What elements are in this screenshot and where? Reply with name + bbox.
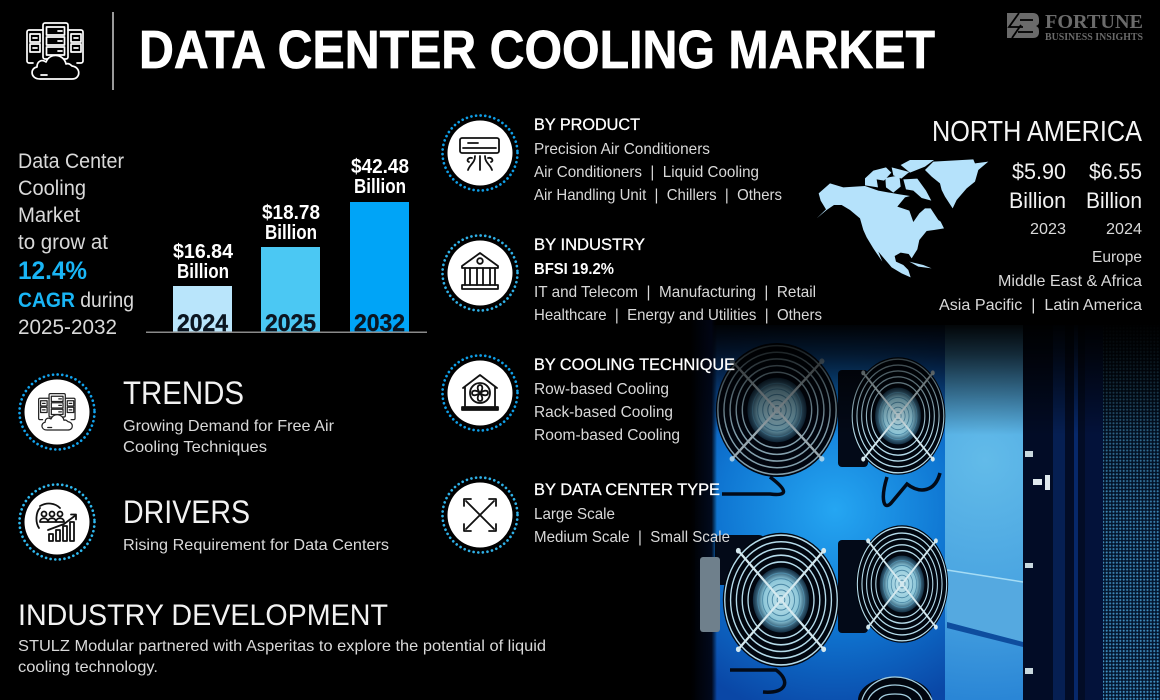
by product: Air Conditioners | Liquid Cooling xyxy=(534,164,759,181)
industry development: STULZ Modular partnered with Asperitas to explore the potential of liquid xyxy=(18,638,546,655)
bar chart: market size xyxy=(146,156,427,337)
market values: 2024 xyxy=(1106,221,1142,238)
market growth text: CAGR during xyxy=(18,289,134,312)
market values: 2023 xyxy=(1030,221,1066,238)
by data center type: Medium Scale | Small Scale xyxy=(534,529,730,546)
bar 2025: Billion xyxy=(265,222,317,244)
drivers text xyxy=(123,494,389,554)
by product: BY PRODUCT xyxy=(534,115,640,134)
by data center type: BY DATA CENTER TYPE xyxy=(534,480,720,499)
bar 2024: $16.84 xyxy=(173,241,234,263)
icon: by data center type arrows xyxy=(442,478,518,552)
logo: Fortune Business Insights xyxy=(1007,11,1143,43)
market growth text: 2025-2032 xyxy=(18,316,117,339)
by industry: BFSI 19.2% xyxy=(534,261,614,278)
by industry: BY INDUSTRY xyxy=(534,235,645,254)
industry development xyxy=(18,599,546,676)
icon: by cooling technique house fan xyxy=(442,356,518,430)
market values: Billion xyxy=(1009,188,1066,213)
market growth text: Cooling xyxy=(18,177,86,200)
bar 2032: 2032 xyxy=(354,310,405,337)
by cooling technique xyxy=(534,355,735,444)
by cooling technique: Rack-based Cooling xyxy=(534,404,673,421)
by data center type xyxy=(534,480,730,546)
by industry xyxy=(534,235,822,324)
by product: Precision Air Conditioners xyxy=(534,141,710,158)
by industry: Healthcare | Energy and Utilities | Others xyxy=(534,307,822,324)
logo: Fortune Business Insights: FORTUNE xyxy=(1045,11,1143,33)
market growth text: to grow at xyxy=(18,231,108,254)
drivers text: Rising Requirement for Data Centers xyxy=(123,537,389,554)
other regions xyxy=(939,249,1142,314)
by product xyxy=(534,115,782,204)
market growth text: Data Center xyxy=(18,150,124,173)
icon: by industry bank building xyxy=(442,236,518,310)
trends text xyxy=(123,375,335,456)
bar 2024: 2024 xyxy=(177,310,229,337)
trends text: Growing Demand for Free Air xyxy=(123,418,335,435)
bar 2025: $18.78 xyxy=(262,202,320,224)
icon: by product air conditioner xyxy=(442,116,518,190)
other regions: Europe xyxy=(1092,249,1142,266)
bar 2032: Billion xyxy=(354,176,406,198)
by cooling technique: Row-based Cooling xyxy=(534,381,669,398)
by product: Air Handling Unit | Chillers | Others xyxy=(534,187,782,204)
market growth text: 12.4% xyxy=(18,257,87,285)
bar 2032 xyxy=(350,156,409,337)
by industry: IT and Telecom | Manufacturing | Retail xyxy=(534,284,816,301)
trends text: Cooling Techniques xyxy=(123,439,267,456)
map: North America xyxy=(817,159,988,277)
header divider xyxy=(112,12,114,90)
industry development: INDUSTRY DEVELOPMENT xyxy=(18,599,388,632)
by cooling technique: BY COOLING TECHNIQUE xyxy=(534,355,735,374)
bar 2024: Billion xyxy=(177,261,229,283)
icon: drivers xyxy=(20,484,94,560)
market values: $6.55 xyxy=(1089,159,1142,184)
bar 2025: 2025 xyxy=(265,310,316,337)
by cooling technique: Room-based Cooling xyxy=(534,427,680,444)
bar 2032: $42.48 xyxy=(351,156,409,178)
bar 2025 xyxy=(261,202,320,337)
by data center type: Large Scale xyxy=(534,506,615,523)
other regions: Middle East & Africa xyxy=(998,273,1142,290)
industry development: cooling technology. xyxy=(18,659,158,676)
header icon: servers and cloud xyxy=(27,23,83,79)
other regions: Asia Pacific | Latin America xyxy=(939,297,1142,314)
market values xyxy=(1009,159,1142,238)
market values: $5.90 xyxy=(1012,159,1066,184)
market values: Billion xyxy=(1086,188,1142,213)
market growth text: Market xyxy=(18,204,80,227)
icon: trends xyxy=(20,374,94,450)
trends text: TRENDS xyxy=(123,375,244,411)
market growth text xyxy=(18,150,134,339)
background photo: server rack cooling fans xyxy=(690,320,1160,700)
title: DATA CENTER COOLING MARKET xyxy=(139,20,935,80)
bar 2024 xyxy=(173,241,234,337)
drivers text: DRIVERS xyxy=(123,494,250,530)
logo: Fortune Business Insights: BUSINESS INSIGHTS xyxy=(1045,31,1143,43)
